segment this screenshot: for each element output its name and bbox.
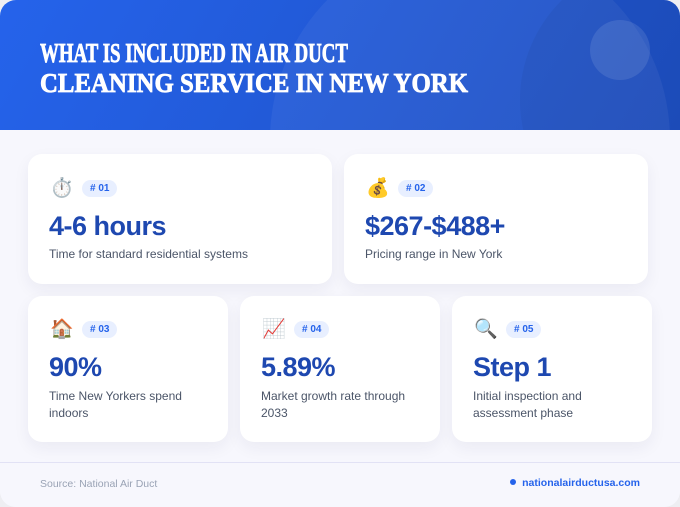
- icon: magnifier: 🔍: [474, 319, 498, 340]
- card 3: [28, 296, 228, 442]
- card 1: [28, 154, 332, 284]
- badge 04: # 04: [302, 324, 321, 335]
- description: Time for standard residential systems: [49, 247, 248, 261]
- website link: nationalairductusa.com: [522, 477, 640, 489]
- description: Pricing range in New York: [365, 247, 502, 261]
- badge 01: # 01: [90, 183, 109, 194]
- stat: 5.89%: [261, 352, 335, 382]
- icon: chart: 📈: [262, 319, 286, 340]
- description: Initial inspection and assessment phase: [473, 389, 582, 420]
- card 4: [240, 296, 440, 442]
- badge 03: [82, 321, 117, 338]
- card 2: [344, 154, 648, 284]
- title: CLEANING SERVICE IN NEW YORK: [40, 68, 468, 98]
- source text: Source: National Air Duct: [40, 478, 157, 490]
- stat: 4-6 hours: [49, 211, 166, 241]
- badge 03: # 03: [90, 324, 109, 335]
- card 5: [452, 296, 652, 442]
- footer: [0, 462, 680, 507]
- description: Market growth rate through 2033: [261, 389, 405, 420]
- icon: house: 🏠: [50, 319, 74, 340]
- icon: stopwatch: ⏱️: [50, 178, 74, 199]
- badge 05: # 05: [514, 324, 533, 335]
- title: [40, 38, 468, 98]
- badge 02: [398, 180, 433, 197]
- badge 05: [506, 321, 541, 338]
- description: Time New Yorkers spend indoors: [49, 389, 182, 420]
- badge 04: [294, 321, 329, 338]
- stat: 90%: [49, 352, 102, 382]
- badge 02: # 02: [406, 183, 425, 194]
- title: WHAT IS INCLUDED IN AIR DUCT: [40, 38, 348, 68]
- badge 01: [82, 180, 117, 197]
- icon: money bag: 💰: [366, 178, 390, 199]
- stat: Step 1: [473, 352, 551, 382]
- header banner: [0, 0, 680, 130]
- stat: $267-$488+: [365, 211, 505, 241]
